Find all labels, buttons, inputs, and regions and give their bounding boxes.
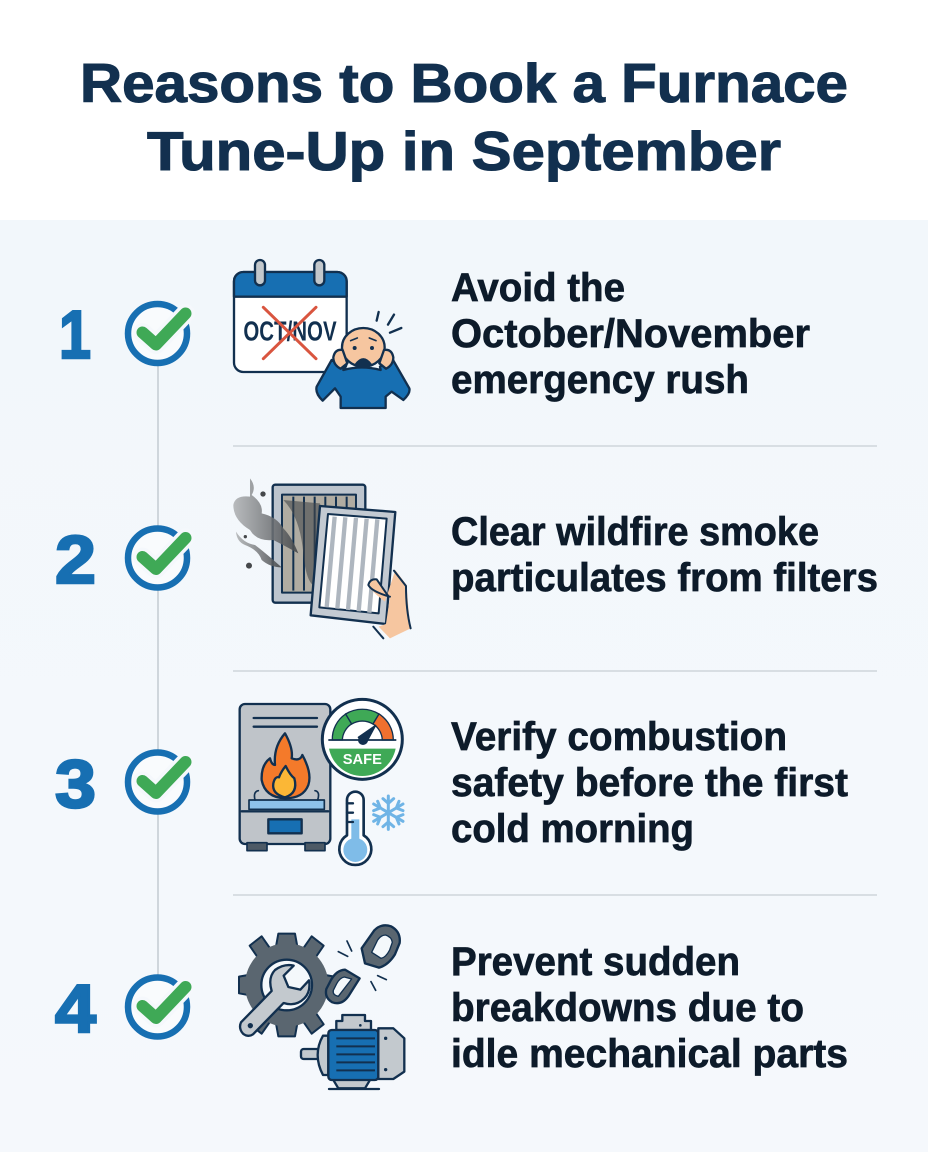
reason 1 text: emergency rush [451,358,749,402]
reason 2 text: Clear wildfire smoke [451,510,819,554]
reason 4 text: breakdowns due to [451,986,804,1030]
number 1: 1 [59,297,91,373]
reason 4 text: idle mechanical parts [451,1032,848,1076]
panel: reason 2 [55,478,878,638]
icon: furnace, safety gauge and thermometer: SAFE [343,752,382,768]
reason 4 text: Prevent sudden [451,940,740,984]
reason 1 text [451,266,810,402]
icon: calendar with stressed person [234,260,410,408]
number 3: 3 [55,746,96,822]
icon: check 4 [128,978,187,1036]
reason 4 text [451,940,848,1076]
icon: gear, wrench, broken chain and motor [239,925,404,1089]
number 2: 2 [55,522,96,598]
reason 3 text [451,715,848,851]
reason 3 text: Verify combustion [451,715,787,759]
panel: reason 1 [59,260,810,408]
reason 3 text: cold morning [451,807,694,851]
reason 3 text: safety before the first [451,761,848,805]
number 4: 4 [55,971,96,1047]
title: Tune-Up in September [147,120,781,182]
panel: reason 3 [55,699,848,865]
icon: calendar with stressed person: OCT/NOV [243,316,337,347]
icon: check 2 [128,528,187,588]
panel: reason 4 [55,925,848,1089]
reason 2 text: particulates from filters [451,556,878,600]
icon: dirty and clean filters with smoke [233,478,411,638]
icon: check 1 [128,304,187,363]
title: Reasons to Book a Furnace [80,52,848,114]
reason 1 text: October/November [451,312,810,356]
title [80,52,848,182]
icon: check 3 [128,752,187,812]
reason 1 text: Avoid the [451,266,625,310]
reason 2 text [451,510,878,600]
icon: furnace, safety gauge and thermometer [240,699,403,865]
